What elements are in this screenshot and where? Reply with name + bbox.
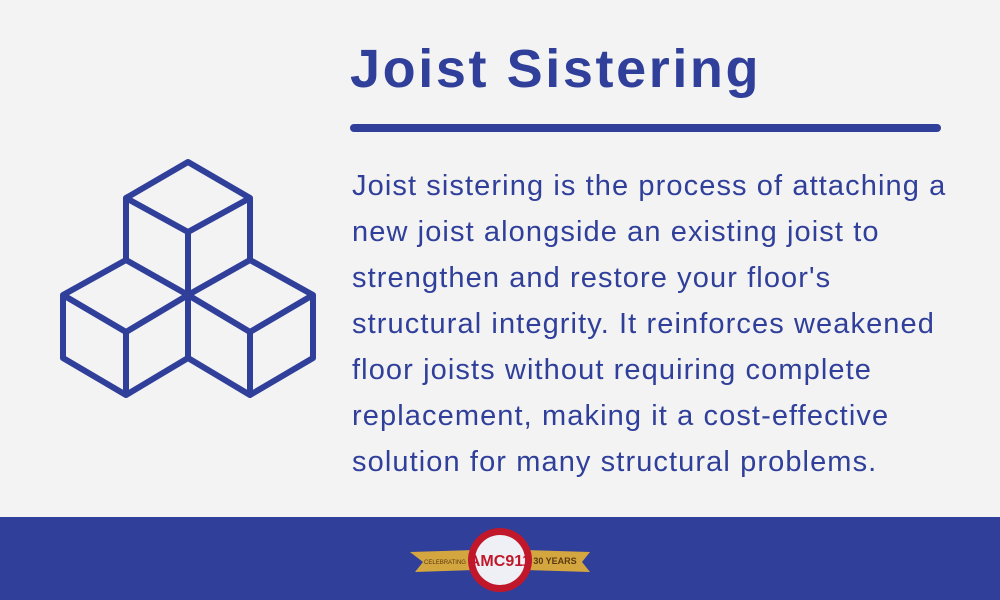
text block: description: structural integrity. It reinforces weakened — [352, 308, 935, 340]
text block: description — [352, 170, 946, 478]
logo: AMC911 celebrating 30 years: CELEBRATING — [424, 560, 466, 566]
text block: description: replacement, making it a cost-effective — [352, 400, 889, 432]
text block: description: strengthen and restore your floor's — [352, 262, 831, 294]
logo: AMC911 celebrating 30 years — [410, 528, 590, 592]
divider bar under title — [350, 124, 941, 132]
text block: description: solution for many structural problems. — [352, 446, 877, 478]
icon: stacked cubes — [60, 159, 316, 398]
logo: AMC911 celebrating 30 years: 30 YEARS — [533, 556, 577, 566]
text block: description: new joist alongside an existing joist to — [352, 216, 880, 248]
logo: AMC911 celebrating 30 years: AMC911 — [469, 553, 531, 570]
text block: description: floor joists without requiring complete — [352, 354, 872, 386]
title: Joist Sistering — [350, 39, 761, 99]
text block: description: Joist sistering is the process of attaching a — [352, 170, 946, 202]
footer band — [0, 517, 1000, 600]
